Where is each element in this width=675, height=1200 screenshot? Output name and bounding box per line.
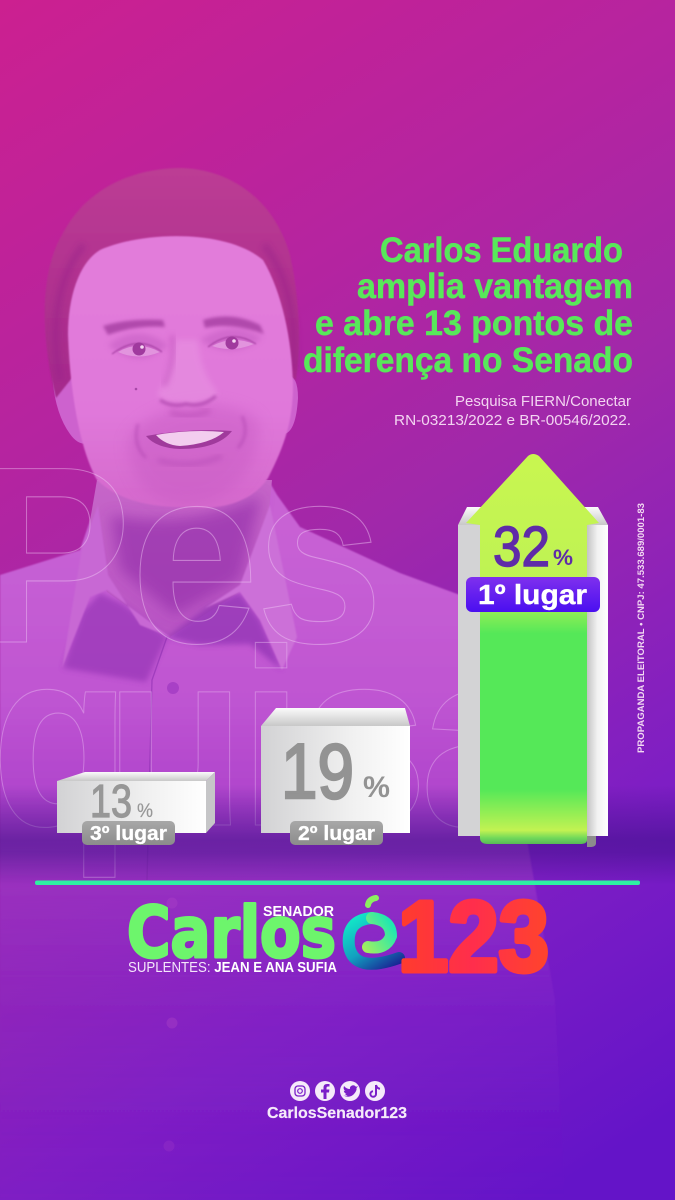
hair — [45, 168, 299, 398]
left shirt collar — [62, 505, 170, 668]
shirt buttons — [164, 682, 179, 1152]
icon: facebook — [315, 1081, 335, 1101]
face — [68, 236, 293, 508]
value 13%: % — [137, 801, 153, 822]
smile — [136, 416, 245, 464]
label 1º lugar — [466, 577, 600, 612]
right shirt collar — [205, 505, 297, 670]
survey source: RN-03213/2022 e BR-00546/2022. — [394, 412, 631, 429]
value 32%: % — [553, 545, 573, 570]
value 32%: 32 — [493, 515, 550, 579]
ghost outline word: quisa: a — [420, 598, 550, 879]
headline — [303, 231, 633, 380]
bar: 1st place 32% — [458, 454, 608, 847]
box — [458, 507, 608, 525]
label 3º lugar: 3º lugar — [90, 823, 167, 845]
headline: amplia vantagem — [357, 267, 633, 306]
floor shadow band — [0, 785, 675, 885]
ghost outline word: Pes: e — [131, 415, 259, 696]
ghost outline word: quisa: u — [106, 598, 246, 879]
mole — [135, 388, 137, 390]
neck — [85, 480, 272, 637]
value 19%: % — [363, 771, 390, 804]
ghost outline word: quisa: s — [300, 598, 428, 879]
box — [57, 772, 215, 781]
logo suplentes line: SUPLENTES: JEAN E ANA SUFIA — [128, 959, 337, 976]
label 2º lugar: 2º lugar — [298, 823, 375, 845]
survey source: Pesquisa FIERN/Conectar — [455, 393, 631, 410]
hair side shading — [56, 245, 294, 380]
green arrow ribbon — [466, 454, 599, 844]
shirt and shoulders — [0, 483, 565, 1200]
ghost outline word: quisa: i — [239, 598, 303, 879]
bar: 3rd place 13% — [57, 772, 215, 845]
headline: Carlos Eduardo — [380, 231, 623, 270]
logo word SENADOR: SENADOR — [263, 903, 334, 920]
ears — [52, 369, 298, 444]
nose — [158, 340, 217, 405]
lower face stubble shading — [128, 405, 258, 504]
social handle: CarlosSenador123 — [267, 1105, 407, 1122]
logo word Carlos: Carlos — [127, 892, 336, 974]
value 19%: 19 — [281, 727, 354, 815]
value 13%: 13 — [90, 775, 132, 827]
headline: diferença no Senado — [303, 341, 633, 380]
headline: e abre 13 pontos de — [315, 304, 633, 343]
shirt placket — [147, 637, 167, 880]
box — [261, 708, 410, 726]
eyes — [112, 336, 256, 356]
divider line — [35, 880, 640, 885]
eyebrows — [103, 316, 264, 335]
neck shadow — [110, 495, 262, 615]
campaign logo — [127, 881, 549, 993]
portrait: candidate in shirt — [0, 168, 565, 1200]
icon: twitter — [340, 1081, 360, 1101]
logo number 123: 123 — [398, 881, 549, 993]
logo é spiral — [349, 898, 399, 964]
shirt opening shadow, right — [167, 593, 282, 670]
bar: 2nd place 19% — [261, 708, 410, 845]
legal text, vertical: PROPAGANDA ELEITORAL • CNPJ: 47.533.689/0001-83 — [636, 503, 647, 753]
social icons — [290, 1081, 385, 1101]
ghost outline word: Pes: s — [256, 415, 383, 696]
icon: tiktok — [365, 1081, 385, 1101]
label 1º lugar: 1º lugar — [478, 579, 587, 610]
survey source — [394, 393, 631, 429]
shirt opening shadow, left — [63, 593, 167, 682]
eye socket shading — [108, 328, 262, 358]
icon: instagram — [290, 1081, 310, 1101]
